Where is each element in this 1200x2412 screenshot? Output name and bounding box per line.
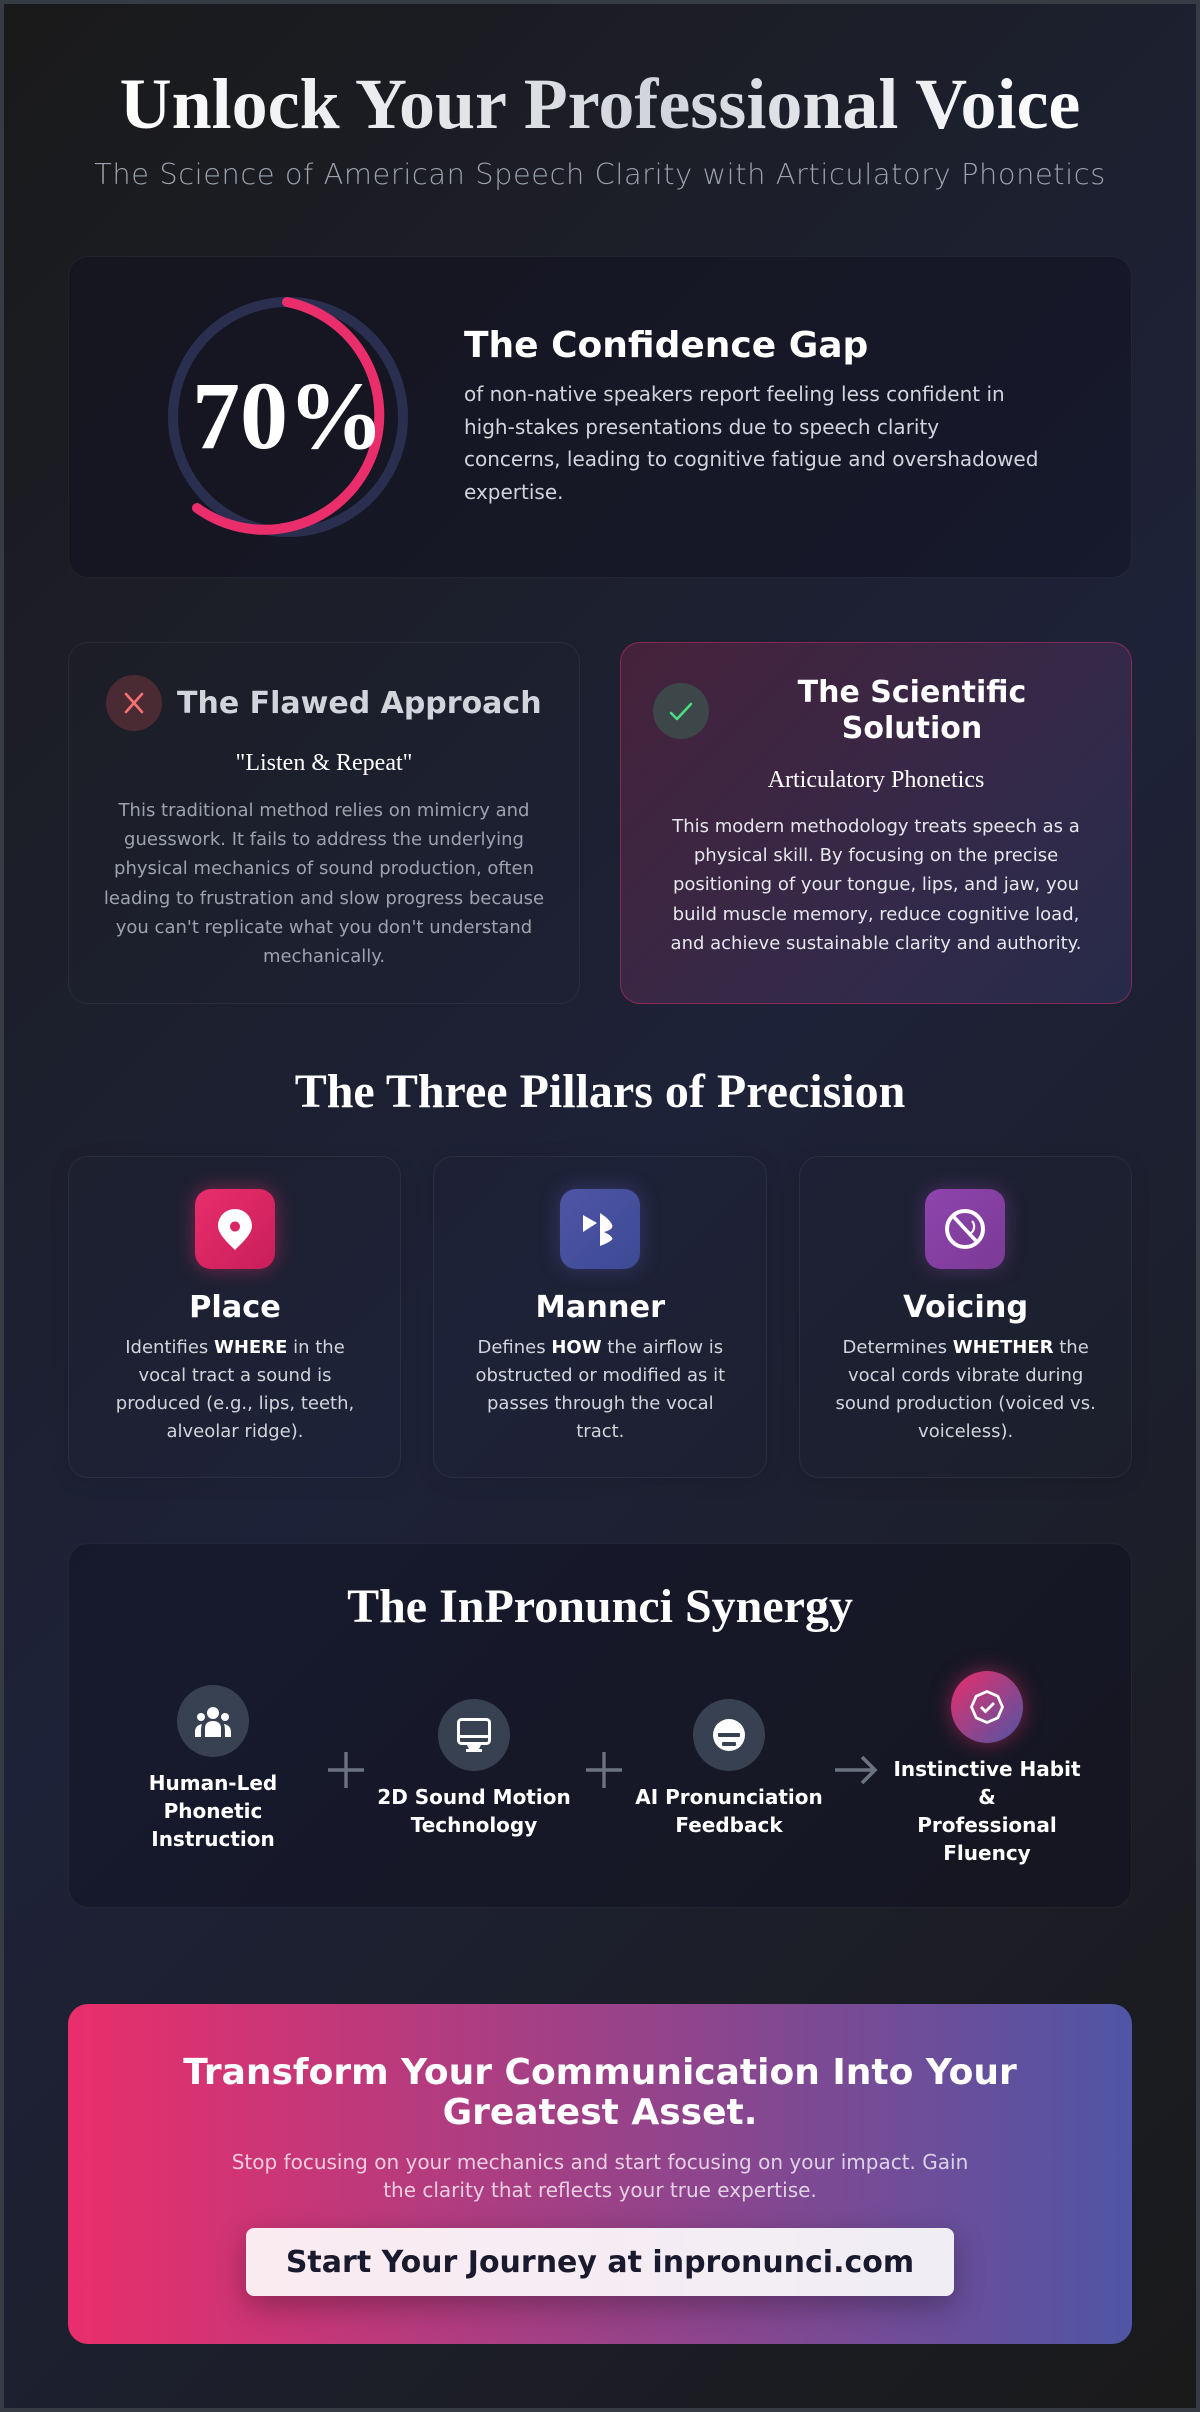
body text: high-stakes presentations due to speech clarity [464,414,939,438]
icon: arrow [835,1756,878,1784]
stat: 70%: 70% [192,362,384,469]
body text: voiceless). [918,1420,1013,1442]
icon: monitor [438,1699,510,1771]
body text: Stop focusing on your mechanics and start focusing on your impact. Gain [232,2150,968,2174]
body text: Determines WHETHER the [843,1336,1089,1358]
panel: voicing [799,1156,1132,1478]
step: 2d sound motion technology [377,1699,571,1837]
icon: airflow shapes [560,1189,640,1269]
body text [232,2150,968,2202]
body text: tract. [576,1420,624,1442]
icon: red cross [106,675,162,731]
body text: Identifies WHERE in the [125,1336,345,1358]
body text: build muscle memory, reduce cognitive load, [673,904,1079,925]
label: 2D Sound Motion [377,1785,571,1809]
panel: the inpronunci synergy [68,1543,1132,1908]
label: Fluency [943,1841,1031,1865]
icon: people group [177,1685,249,1757]
label [377,1785,571,1837]
body text: alveolar ridge). [166,1420,304,1442]
body text: vocal cords vibrate during [848,1364,1083,1386]
subheading: articulatory phonetics: Articulatory Phonetics [768,767,984,793]
icon: plus [328,1752,364,1788]
body text [104,800,544,967]
body text: of non-native speakers report feeling less confident in [464,382,1005,406]
body text [464,382,1038,504]
title: Unlock Your Professional Voice [120,64,1080,144]
label [635,1785,823,1837]
heading: manner: Manner [536,1290,665,1325]
label: Feedback [675,1813,783,1837]
step: ai pronunciation feedback [635,1699,823,1837]
body text: produced (e.g., lips, teeth, [116,1392,354,1414]
body text: mechanically. [263,946,385,967]
body text [116,1336,354,1442]
label: Instruction [151,1827,275,1851]
body text [475,1336,725,1442]
icon: verified badge [951,1671,1023,1743]
label: Phonetic [164,1799,262,1823]
body text: leading to frustration and slow progress because [104,888,544,909]
label: Professional [917,1813,1057,1837]
panel: call to action [68,2004,1132,2344]
body text: expertise. [464,480,564,504]
heading: the scientific solution [798,675,1026,746]
body text: physical skill. By focusing on the precise [694,845,1058,866]
subtitle: The Science of American Speech Clarity with Articulatory Phonetics [94,157,1106,191]
panel: confidence gap [68,256,1132,578]
body text: sound production (voiced vs. [836,1392,1096,1414]
icon: location pin [195,1189,275,1269]
body text: concerns, leading to cognitive fatigue and overshadowed [464,447,1038,471]
heading: voicing: Voicing [903,1290,1028,1325]
label: Human-Led [149,1771,277,1795]
heading: call to action [183,2052,1017,2133]
body text: the clarity that reflects your true expertise. [383,2178,817,2202]
label [149,1771,277,1851]
button [246,2228,954,2296]
step: human-led phonetic instruction [149,1685,277,1851]
heading: place: Place [189,1290,281,1325]
panel: the scientific solution [620,642,1132,1004]
panel: the flawed approach [68,642,580,1004]
heading: call to action: Transform Your Communication Into Your [183,2052,1017,2093]
heading: the scientific solution: Solution [842,711,982,746]
icon: plus [586,1752,622,1788]
heading: call to action: Greatest Asset. [443,2092,757,2133]
body text: obstructed or modified as it [475,1364,725,1386]
body text: This traditional method relies on mimicry and [119,800,529,821]
icon: ai face [693,1699,765,1771]
body text: vocal tract a sound is [139,1364,331,1386]
label: AI Pronunciation [635,1785,823,1809]
body text: positioning of your tongue, lips, and jaw, you [673,874,1079,895]
body text: guesswork. It fails to address the underlying [124,829,524,850]
label: & [978,1785,996,1809]
panel: place [68,1156,401,1478]
heading: the scientific solution: The Scientific [798,675,1026,710]
label [893,1757,1081,1865]
body text [836,1336,1096,1442]
icon: green check [653,683,709,739]
heading: the flawed approach: The Flawed Approach [177,686,542,721]
body text: passes through the vocal [487,1392,714,1414]
body text: you can't replicate what you don't understand [116,917,532,938]
body text: and achieve sustainable clarity and authority. [671,933,1081,954]
icon: no-voice circle [925,1189,1005,1269]
body text: Defines HOW the airflow is [477,1336,723,1358]
heading: the confidence gap: The Confidence Gap [464,325,868,366]
label: Instinctive Habit [893,1757,1081,1781]
label: Technology [411,1813,537,1837]
subheading: listen and repeat: "Listen & Repeat" [236,750,412,776]
body text: physical mechanics of sound production, often [114,858,534,879]
body text: This modern methodology treats speech as a [672,816,1080,837]
button: Start Your Journey at inpronunci.com [286,2245,914,2280]
heading: the inpronunci synergy: The InPronunci Synergy [347,1580,853,1633]
panel: manner [433,1156,767,1478]
body text [671,816,1081,954]
step: instinctive habit and professional fluency [893,1658,1081,1865]
heading: the three pillars of precision: The Three Pillars of Precision [295,1065,905,1118]
donut chart: 70% [168,297,408,537]
